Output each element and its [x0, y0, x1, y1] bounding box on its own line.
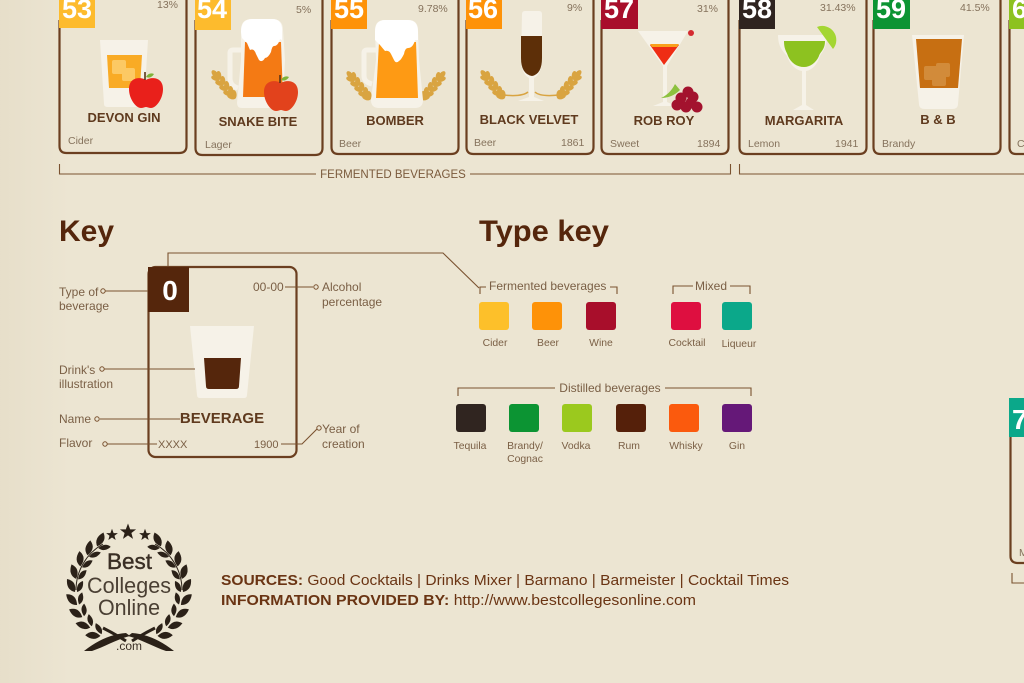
card 59: B & B: Brandy: [882, 138, 916, 150]
key diagram: [59, 253, 479, 457]
card 58: Margarita: 1941: [835, 138, 859, 150]
card 56: Black Velvet: [466, 0, 594, 154]
badge 54: [195, 0, 231, 30]
type key: distilled beverages: Gin: [729, 441, 745, 452]
key badge: 0: [162, 275, 178, 306]
card 57: Rob Roy: ROB ROY: [634, 113, 695, 128]
key diagram: XXXX: [158, 439, 188, 451]
card 57: Rob Roy: [601, 0, 728, 154]
card 54: Snake Bite: 5%: [296, 4, 311, 16]
laurel wreath: [66, 532, 192, 651]
type key: distilled beverages: Whisky: [669, 441, 704, 452]
icon: bomber beer mug: [345, 20, 447, 108]
card 57: Rob Roy: 1894: [697, 138, 721, 150]
card 54: Snake Bite: SNAKE BITE: [219, 114, 298, 129]
icon: snake bite beer mug: [210, 19, 298, 111]
sources: SOURCES: Good Cocktails | Drinks Mixer | Barmano | Barmeister | Cocktail Times: [221, 572, 789, 589]
badge 56: [466, 0, 502, 29]
card 59: B & B: B & B: [920, 112, 956, 127]
card 56: Black Velvet: 1861: [561, 137, 585, 149]
card 59: B & B: 41.5%: [960, 2, 990, 14]
key diagram: BEVERAGE: [180, 410, 264, 427]
bracket: fermented beverages: FERMENTED BEVERAGES: [320, 169, 466, 181]
icon: brandy shot glass: [912, 35, 964, 109]
badge 58: [739, 0, 775, 29]
key diagram: 00-00: [253, 280, 284, 294]
type key: distilled beverages: Rum: [618, 441, 640, 452]
key diagram: Flavor: [59, 436, 92, 450]
icon: rob roy cocktail with grapes: [638, 30, 702, 112]
card 53: Devon Gin: Cider: [68, 135, 94, 147]
heading: Type key: Type key: [479, 215, 609, 248]
sources: [221, 572, 789, 609]
type key: distilled beverages: Cognac: [507, 454, 543, 465]
type key: mixed: Liqueur: [722, 339, 757, 350]
card 59: B & B: [873, 0, 1000, 154]
card 56: Black Velvet: BLACK VELVET: [480, 112, 578, 127]
type key: fermented beverages: Cider: [483, 338, 508, 349]
card 53: Devon Gin: [59, 0, 186, 153]
key diagram: Drink's: [59, 363, 95, 377]
card 57: Rob Roy: 31%: [697, 3, 718, 15]
key diagram: illustration: [59, 377, 113, 391]
key drink illustration: [190, 326, 254, 398]
card 55: Bomber: Beer: [339, 138, 362, 150]
type key: distilled beverages: Brandy/: [507, 441, 543, 452]
logo: Best Colleges Online: Best: [107, 549, 152, 574]
card 56: Black Velvet: 9%: [567, 2, 582, 14]
key diagram: beverage: [59, 299, 109, 313]
card 57: Rob Roy: Sweet: [610, 138, 639, 150]
type key: distilled beverages: [454, 381, 752, 465]
card 58: Margarita: 31.43%: [820, 2, 856, 14]
type key: fermented beverages: [479, 279, 617, 349]
type key: distilled beverages: Tequila: [454, 441, 487, 452]
card 56: Black Velvet: Beer: [474, 137, 497, 149]
card 58: Margarita: [739, 0, 866, 154]
card 58: Margarita: MARGARITA: [765, 113, 844, 128]
key diagram: Year of: [322, 422, 360, 436]
card 55: Bomber: BOMBER: [366, 113, 424, 128]
logo: Best Colleges Online: Online: [98, 595, 160, 620]
card 55: Bomber: [331, 0, 458, 154]
logo: Best Colleges Online: .com: [116, 639, 142, 653]
key diagram: Alcohol: [322, 280, 361, 294]
type key: mixed: [669, 279, 757, 350]
key diagram: Name: [59, 412, 91, 426]
type key: fermented beverages: Fermented beverages: [489, 279, 606, 293]
key diagram: creation: [322, 437, 365, 451]
key diagram: Type of: [59, 285, 99, 299]
icon: cider glass with apple: [100, 40, 163, 108]
type key: mixed: Cocktail: [669, 338, 705, 349]
card 58: Margarita: Lemon: [748, 138, 780, 150]
bracket: fermented beverages: [60, 164, 730, 181]
card 53: Devon Gin: DEVON GIN: [88, 110, 160, 125]
badge 55: [331, 0, 367, 29]
key diagram: percentage: [322, 295, 382, 309]
leader lines: [100, 253, 479, 444]
badge 57: [601, 0, 638, 29]
partial card at right edge: [1009, 398, 1024, 583]
badge 59: [873, 0, 910, 29]
icon: black velvet flute: [479, 11, 583, 101]
stars: [106, 524, 151, 540]
logo: Best Colleges Online: [66, 524, 192, 653]
logo: Best Colleges Online: Colleges: [87, 573, 171, 598]
card 60: partial: [1009, 0, 1024, 154]
card 54: Snake Bite: Lager: [205, 139, 232, 151]
heading: Key: Key: [59, 215, 114, 248]
type key: distilled beverages: Distilled beverages: [559, 381, 661, 395]
key badge: [148, 267, 189, 312]
bracket: next group: [740, 164, 1024, 174]
type key: fermented beverages: Beer: [537, 338, 560, 349]
type key: fermented beverages: Wine: [589, 338, 613, 349]
type key: distilled beverages: Vodka: [562, 441, 591, 452]
card 55: Bomber: 9.78%: [418, 3, 448, 15]
key diagram: 1900: [254, 439, 278, 451]
type key: mixed: Mixed: [695, 279, 727, 293]
icon: margarita glass: [778, 26, 836, 110]
card 54: Snake Bite: [195, 0, 322, 155]
sources: INFORMATION PROVIDED BY: http://www.bestcollegesonline.com: [221, 592, 696, 609]
